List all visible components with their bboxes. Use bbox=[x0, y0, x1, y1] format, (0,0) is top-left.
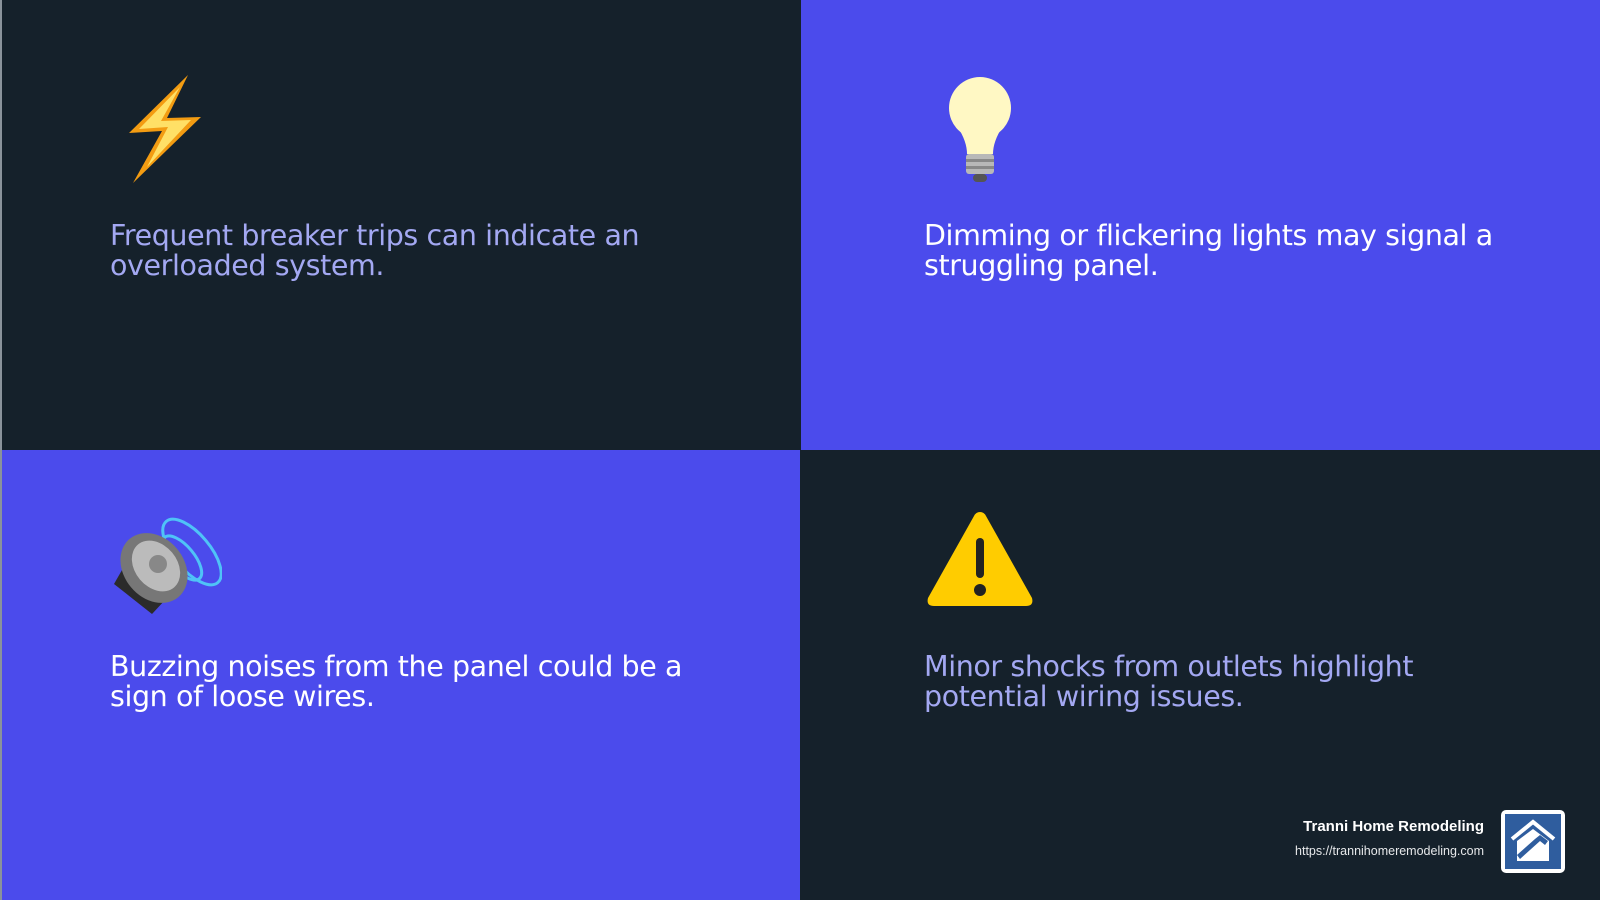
icon: light bulb bbox=[949, 77, 1011, 182]
branding: company name and url: https://trannihomeremodeling.com bbox=[1295, 844, 1484, 858]
text: flickering lights: Dimming or flickering lights may signal a bbox=[924, 219, 1493, 252]
text: minor shocks bbox=[924, 650, 1413, 713]
icon: speaker bbox=[114, 518, 222, 614]
text: breaker trips: overloaded system. bbox=[110, 249, 384, 282]
text: minor shocks: potential wiring issues. bbox=[924, 680, 1243, 713]
text: breaker trips bbox=[110, 219, 639, 282]
text: buzzing noises bbox=[110, 650, 682, 713]
panel: buzzing noises bbox=[0, 450, 800, 900]
logo: house with hammer bbox=[1501, 810, 1565, 873]
text: flickering lights: struggling panel. bbox=[924, 249, 1158, 282]
panel: minor shocks bbox=[801, 450, 1600, 900]
text: breaker trips: Frequent breaker trips can indicate an bbox=[110, 219, 639, 252]
panel: breaker trips bbox=[0, 0, 800, 450]
branding: company name and url bbox=[1295, 818, 1484, 858]
text: buzzing noises: Buzzing noises from the panel could be a bbox=[110, 650, 682, 683]
icon: warning sign bbox=[928, 512, 1032, 606]
text: minor shocks: Minor shocks from outlets highlight bbox=[924, 650, 1413, 683]
branding: company name and url: Tranni Home Remodeling bbox=[1303, 818, 1484, 835]
icon: lightning bolt bbox=[129, 75, 201, 183]
panel: flickering lights bbox=[801, 0, 1600, 450]
text: flickering lights bbox=[924, 219, 1493, 282]
text: buzzing noises: sign of loose wires. bbox=[110, 680, 375, 713]
